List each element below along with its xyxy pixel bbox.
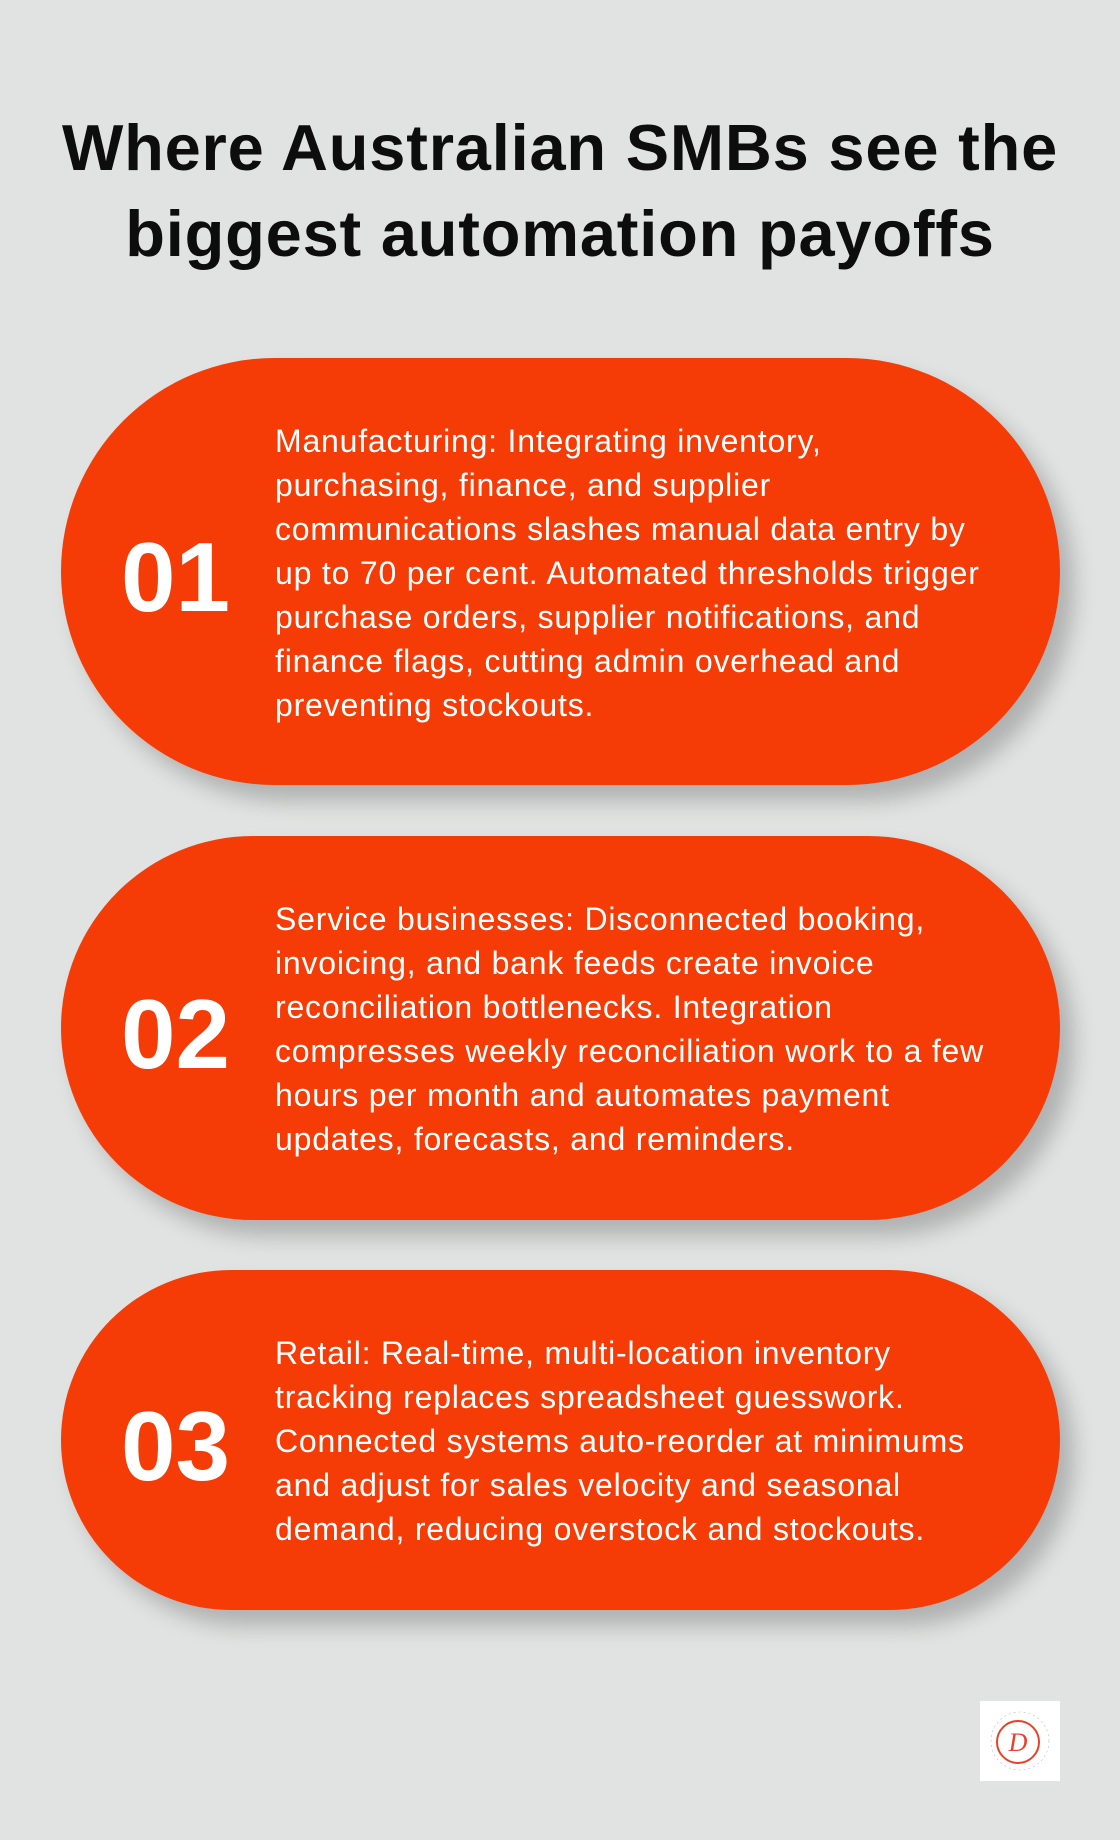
text: retail: and adjust for sales velocity and seasonal bbox=[275, 1467, 901, 1503]
panel: service businesses bbox=[61, 836, 1060, 1220]
number 01: 01 bbox=[121, 522, 230, 632]
text: retail: tracking replaces spreadsheet guesswork. bbox=[275, 1379, 905, 1415]
logo: D bbox=[1008, 1728, 1028, 1757]
panel: retail bbox=[61, 1270, 1060, 1610]
panel: manufacturing bbox=[61, 358, 1060, 785]
text: retail: demand, reducing overstock and stockouts. bbox=[275, 1511, 925, 1547]
title: biggest automation payoffs bbox=[125, 197, 995, 270]
text: manufacturing: finance flags, cutting admin overhead and bbox=[275, 643, 900, 679]
text: manufacturing bbox=[275, 423, 980, 723]
text: service businesses: compresses weekly reconciliation work to a few bbox=[275, 1033, 984, 1069]
text: retail: Connected systems auto-reorder at minimums bbox=[275, 1423, 965, 1459]
text: service businesses bbox=[275, 901, 984, 1157]
text: manufacturing: purchasing, finance, and supplier bbox=[275, 467, 771, 503]
text: service businesses: hours per month and automates payment bbox=[275, 1077, 890, 1113]
text: manufacturing: preventing stockouts. bbox=[275, 687, 594, 723]
text: manufacturing: purchase orders, supplier notifications, and bbox=[275, 599, 920, 635]
number 03: 03 bbox=[121, 1391, 230, 1501]
text: retail: Retail: Real-time, multi-location inventory bbox=[275, 1335, 891, 1371]
number 02: 02 bbox=[121, 979, 230, 1089]
text: service businesses: invoicing, and bank feeds create invoice bbox=[275, 945, 874, 981]
text: service businesses: updates, forecasts, and reminders. bbox=[275, 1121, 795, 1157]
text: manufacturing: Manufacturing: Integrating inventory, bbox=[275, 423, 822, 459]
text: service businesses: reconciliation bottlenecks. Integration bbox=[275, 989, 833, 1025]
logo bbox=[980, 1701, 1060, 1781]
text: manufacturing: up to 70 per cent. Automated thresholds trigger bbox=[275, 555, 980, 591]
text: manufacturing: communications slashes manual data entry by bbox=[275, 511, 966, 547]
text: retail bbox=[275, 1335, 965, 1547]
text: service businesses: Service businesses: Disconnected booking, bbox=[275, 901, 925, 937]
title bbox=[62, 111, 1058, 270]
title: Where Australian SMBs see the bbox=[62, 111, 1058, 184]
